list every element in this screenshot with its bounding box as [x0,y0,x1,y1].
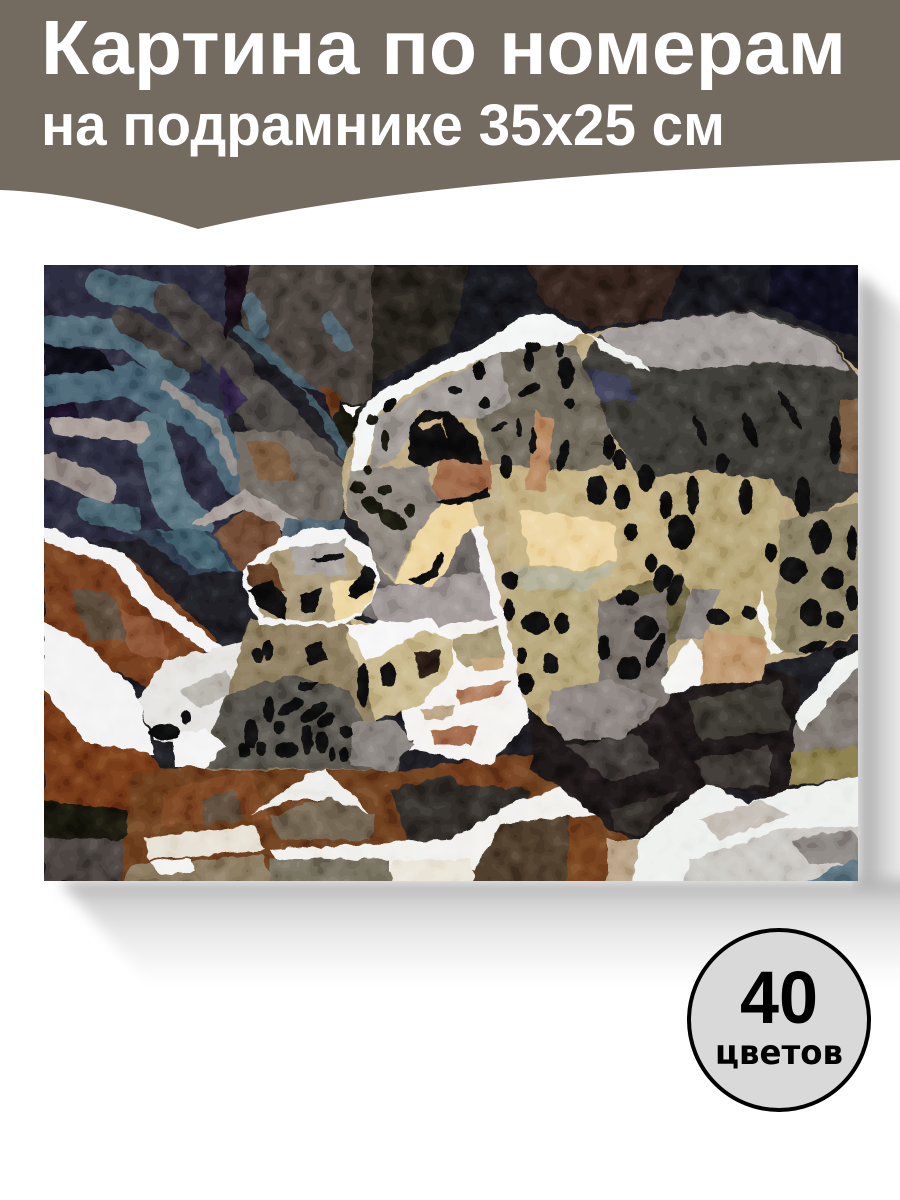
fine markings [148,342,858,763]
badge label: цветов [715,1033,843,1073]
mottled paint texture [44,265,858,881]
painting: snow leopard and cub [44,265,858,881]
cub [137,527,455,772]
snow and grey ground between the animals [345,525,530,765]
left rocks [44,528,225,881]
title: Картина по номерам [41,5,846,91]
eye of adult [408,410,482,468]
bottom ground [122,650,858,881]
canvas shadow [60,275,900,985]
banner [0,0,900,229]
subtitle: на подрамнике 35х25 см [41,93,725,158]
adult leopard [335,310,880,740]
ear [335,403,362,445]
rock background [30,250,880,575]
badge number: 40 [740,956,818,1039]
muzzle markings [350,415,415,535]
badge: 40 colours [689,930,869,1110]
